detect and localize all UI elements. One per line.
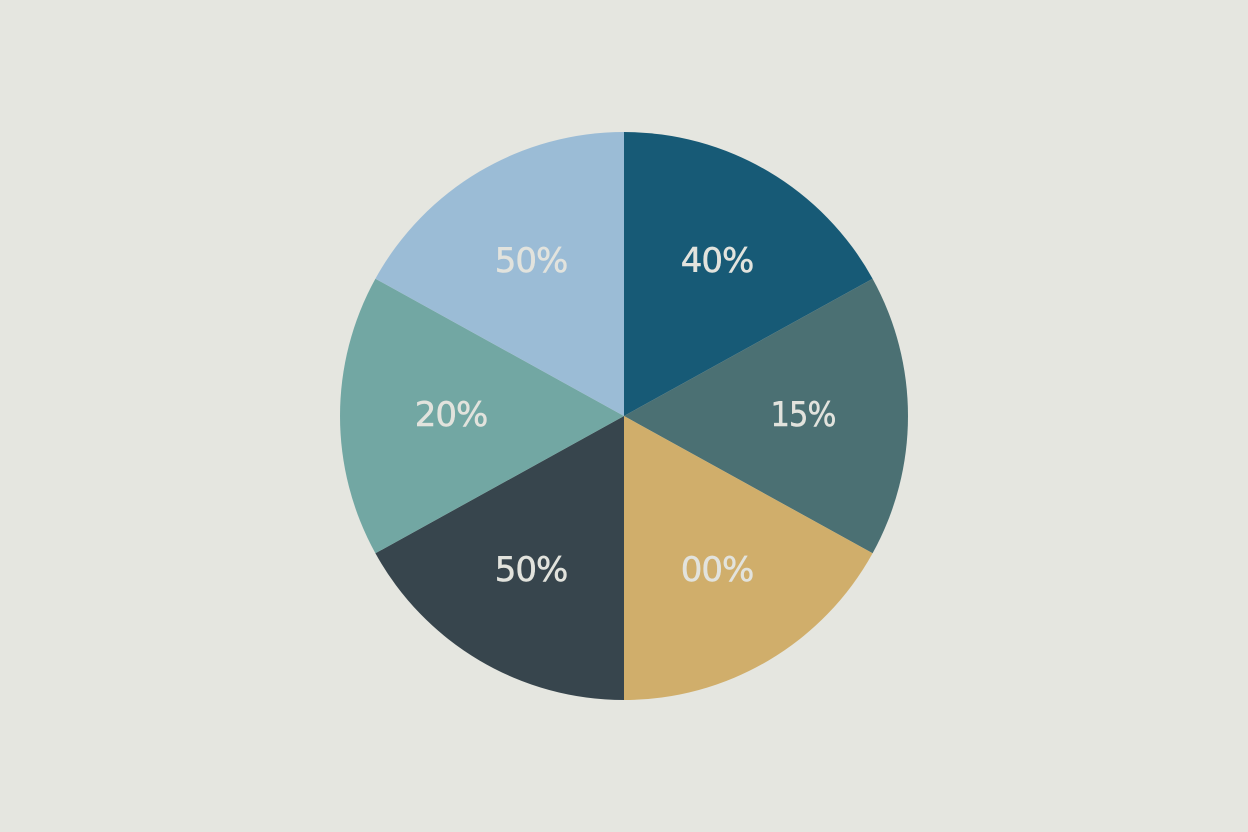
slice: 50% light blue [375, 132, 624, 416]
slice: 20% sage teal: 20% [415, 395, 487, 435]
slice: 00% mustard [624, 416, 873, 700]
slice: 50% charcoal [375, 416, 624, 700]
slice: 20% sage teal [340, 279, 624, 553]
slice: 50% charcoal: 50% [495, 550, 567, 590]
slice: 40% dark blue: 40% [681, 241, 753, 281]
slice: 15% slate teal: 15% [770, 395, 836, 435]
slice: 50% light blue: 50% [495, 241, 567, 281]
slice: 40% dark blue [624, 132, 873, 416]
slice: 00% mustard: 00% [681, 550, 753, 590]
slice: 15% slate teal [624, 279, 908, 553]
